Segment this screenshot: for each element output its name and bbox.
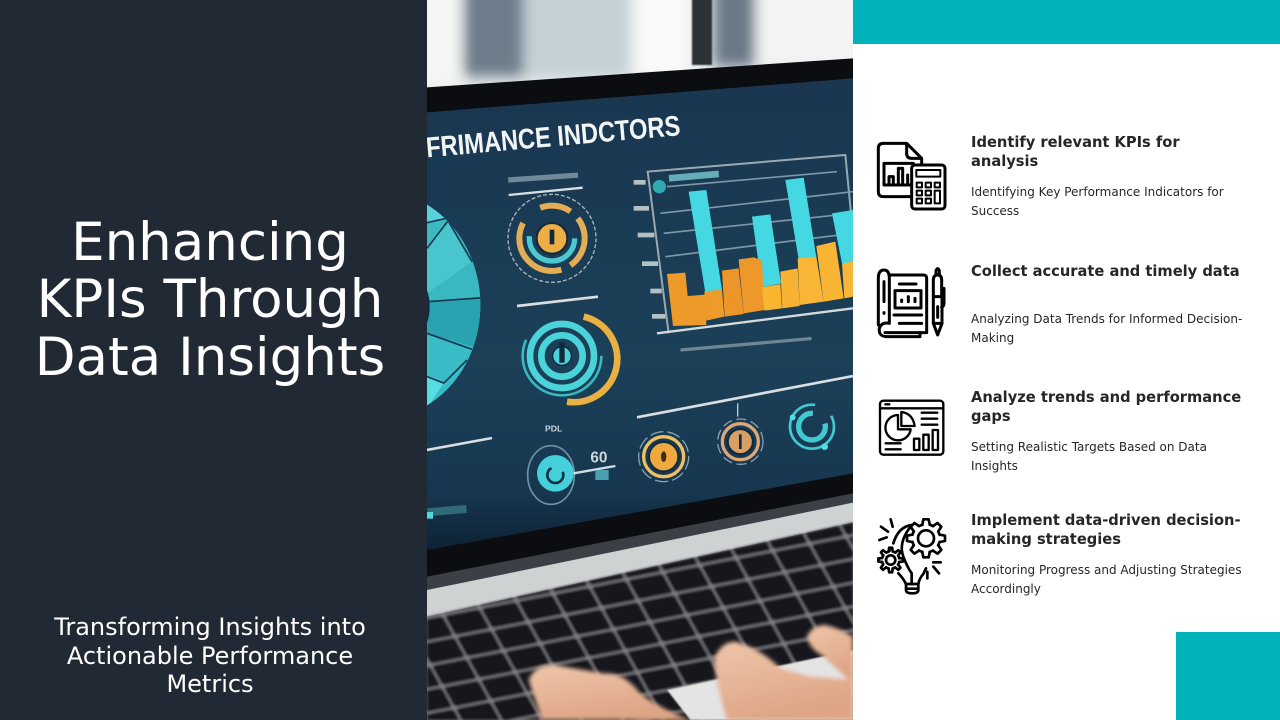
item 3 heading: Analyze trends and performance gaps [971,389,1241,425]
orange bars [667,242,853,326]
laptop hinge [427,493,853,591]
cyan bars [689,178,853,293]
subtitle: Actionable Performance [67,642,353,670]
title: Data Insights [35,327,385,388]
bottom-right teal square [1176,632,1280,720]
gauge 2 yellow arc [567,317,617,402]
axis labels [634,180,812,352]
item 4 [971,512,1242,596]
screen lower section [427,376,853,519]
item 4 heading: Implement data-driven decision-making strategies [971,512,1241,548]
trackpad [667,650,853,720]
gauge 1 [508,194,596,282]
gauge 2 [523,317,601,395]
indicator: tan gauge [718,403,763,464]
indicator: cyan key gauge: PDL [545,424,563,434]
subtitle: Metrics [166,670,254,698]
screen heading: FRIMANCE INDCTORS [427,110,682,164]
keyboard deck [427,503,853,720]
photo: laptop showing KPI dashboard [427,0,853,720]
panel: left title panel [0,0,427,720]
hands [529,625,853,720]
keyboard keys [427,523,853,720]
item 3 description: Setting Realistic Targets Based on Data Insights [971,440,1207,473]
item 1 description: Identifying Key Performance Indicators for Success [971,185,1224,218]
pie chart on screen [427,204,480,406]
icon: report book and pen [876,267,946,338]
bar chart on screen [634,155,853,352]
item 3 [971,389,1241,473]
icon: document and calculator [876,142,946,210]
laptop bezel [427,58,853,580]
item 2 [971,263,1242,345]
blurred office background [407,0,874,100]
progress bar [427,505,467,519]
subtitle [54,613,366,698]
item 1 [971,134,1224,218]
top-right teal band [853,0,1280,44]
indicator: cyan spiral [790,405,834,450]
title: Enhancing [71,212,349,273]
icon: dashboard window [878,400,944,456]
title: KPIs Through [37,269,383,330]
item 1 heading: Identify relevant KPIs for analysis [971,134,1180,170]
item 2 heading: Collect accurate and timely data [971,263,1240,280]
title [35,212,385,388]
icon: lightbulb with gears [877,518,946,595]
divider lines [637,376,853,417]
indicator: yellow gauge [639,432,689,482]
indicator: cyan key gauge: 60 [590,450,607,467]
silver palm strip [427,503,853,617]
item 4 description: Monitoring Progress and Adjusting Strategies Accordingly [971,563,1242,596]
gauge 1 label [508,172,583,195]
indicator: cyan key gauge [528,424,615,504]
laptop screen [427,78,853,550]
item 2 description: Analyzing Data Trends for Informed Decision-Making [971,312,1242,345]
gauge 2 divider [517,297,598,306]
subtitle: Transforming Insights into [54,613,366,641]
